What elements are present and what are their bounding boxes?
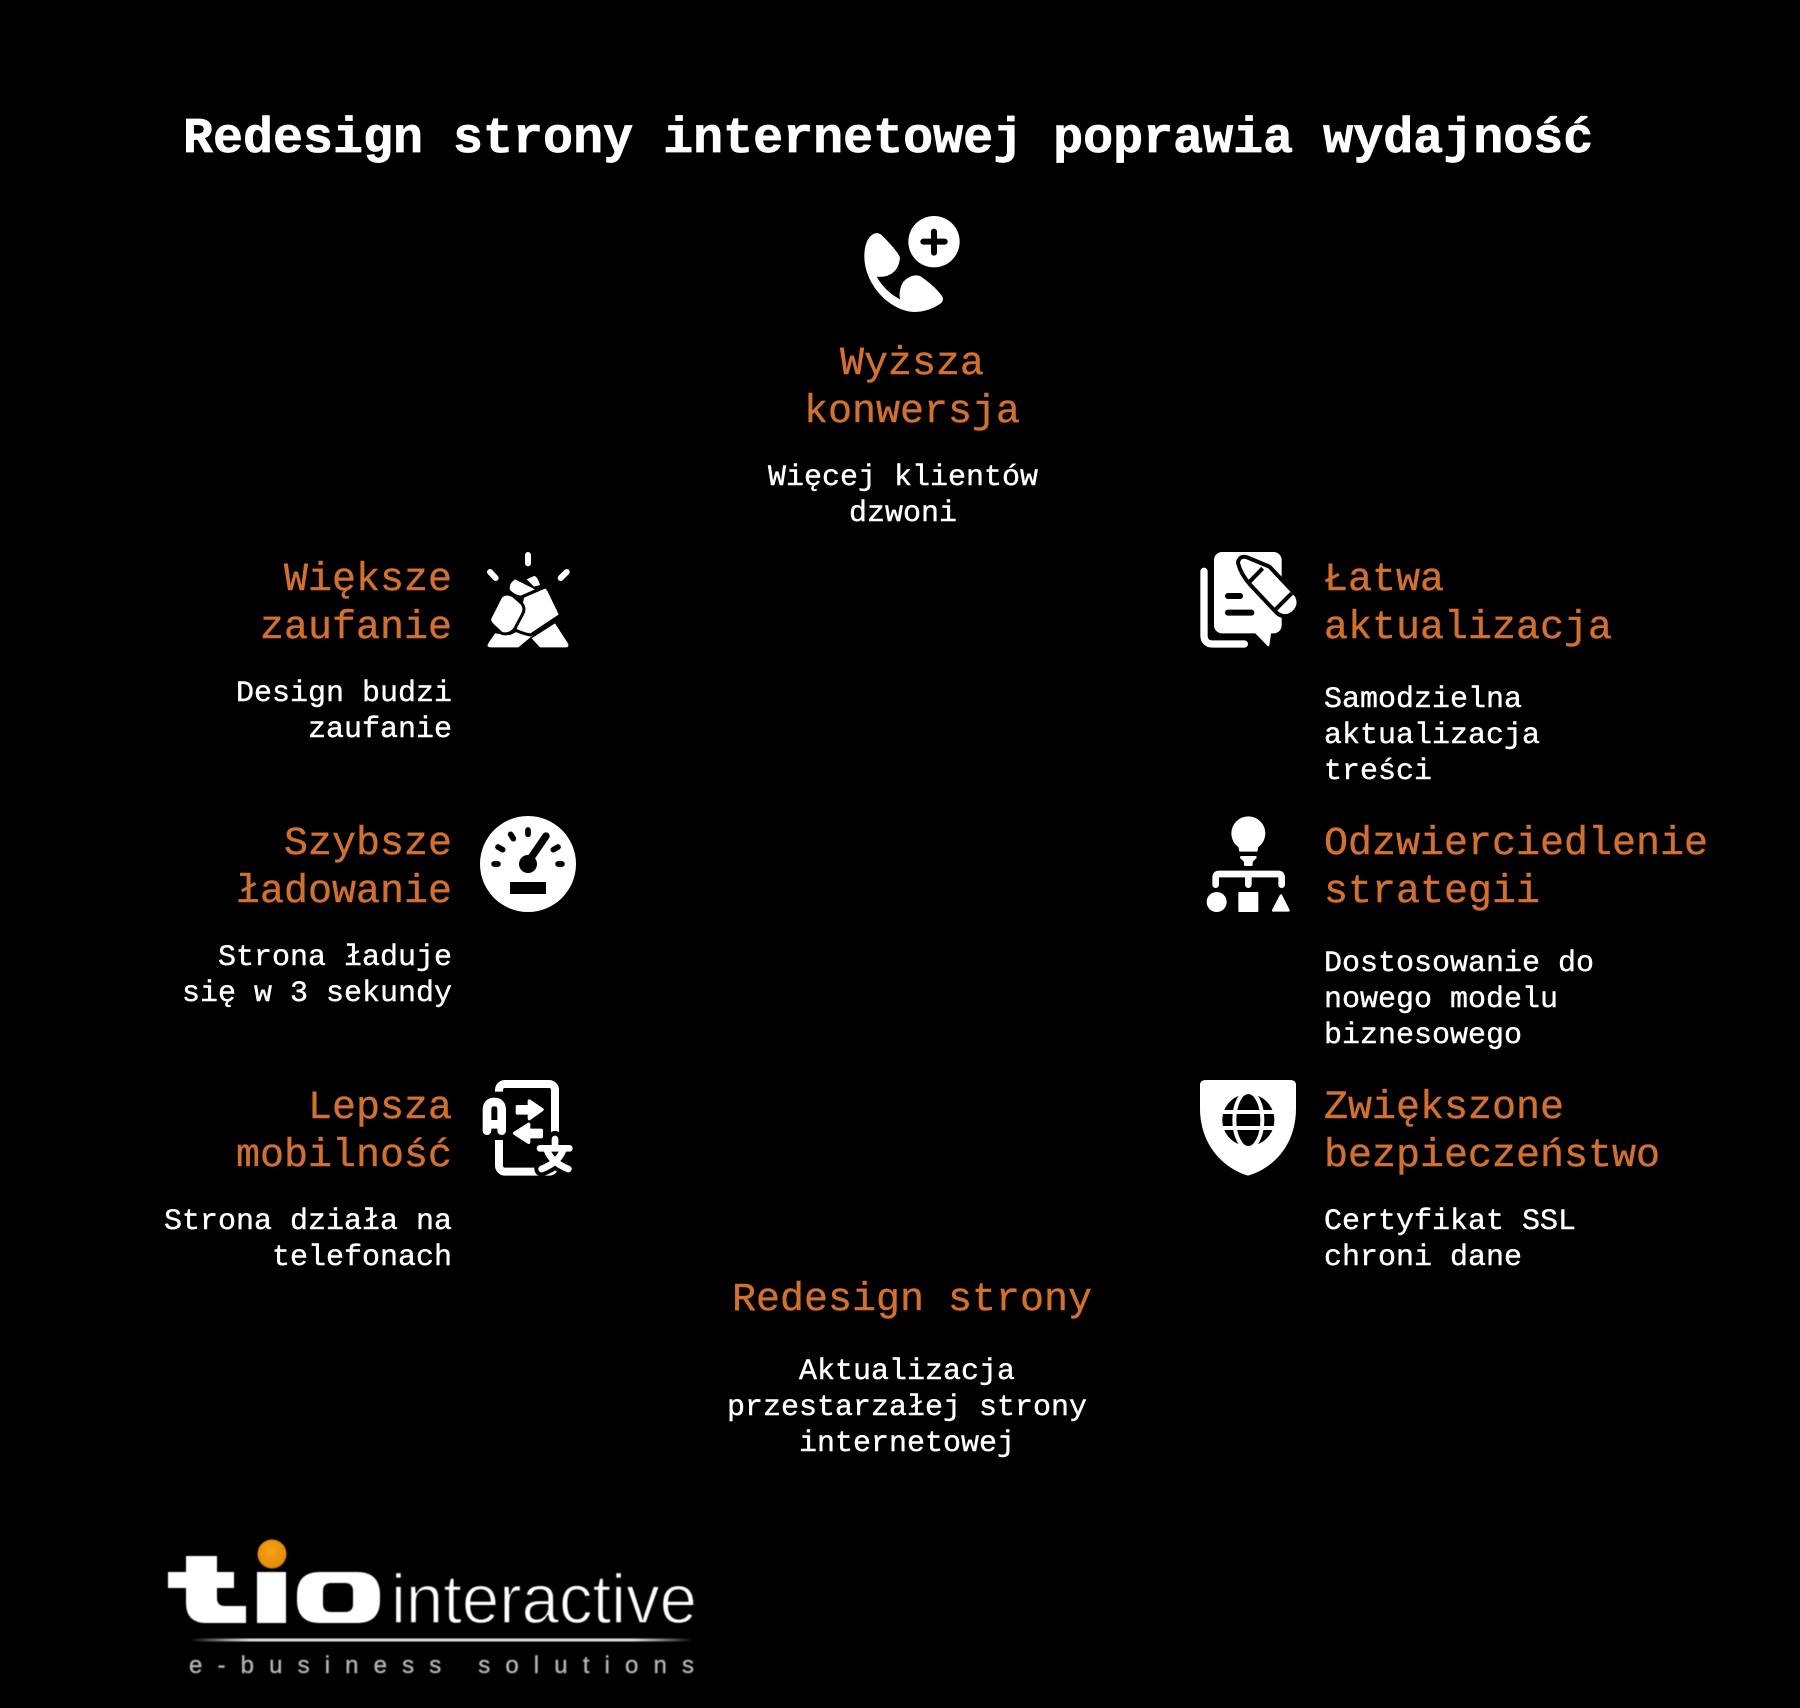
panel: Lepsza mobilność: [164, 1080, 573, 1275]
panel: Wyższa konwersja: [768, 216, 1038, 531]
text: Samodzielna aktualizacja treści: Samodzielna aktualizacja treści: [1324, 683, 1540, 789]
heading: Szybsze ładowanie: Szybsze ładowanie: [236, 822, 452, 915]
icon: shield with globe: [1200, 1080, 1296, 1176]
panel: Łatwa aktualizacja: [1200, 552, 1612, 789]
logo: tio interactive: [167, 1538, 697, 1679]
text: Strona działa na telefonach: Strona działa na telefonach: [164, 1205, 452, 1275]
panel: Redesign strony: [727, 1278, 1092, 1461]
panel: Zwiększone bezpieczeństwo: [1200, 1080, 1660, 1275]
icon: handshake: [487, 552, 570, 648]
panel: Większe zaufanie: [236, 552, 570, 747]
heading: Redesign strony: Redesign strony: [732, 1278, 1092, 1323]
icon: phone translation: [482, 1080, 573, 1176]
heading: Wyższa konwersja: Wyższa konwersja: [804, 342, 1020, 435]
panel: Szybsze ładowanie: [182, 816, 576, 1011]
logo: tio interactive: interactive: [391, 1560, 697, 1638]
text: Dostosowanie do nowego modelu biznesowego: Dostosowanie do nowego modelu biznesowego: [1324, 947, 1594, 1053]
icon: document with pencil: [1200, 552, 1297, 648]
heading: Lepsza mobilność: Lepsza mobilność: [236, 1086, 452, 1179]
text: Certyfikat SSL chroni dane: Certyfikat SSL chroni dane: [1324, 1205, 1576, 1275]
heading: Zwiększone bezpieczeństwo: Zwiększone bezpieczeństwo: [1324, 1086, 1660, 1179]
text: Design budzi zaufanie: Design budzi zaufanie: [236, 677, 452, 747]
text: Więcej klientów dzwoni: Więcej klientów dzwoni: [768, 461, 1038, 531]
icon: bulb with org chart: [1206, 816, 1290, 912]
text: Strona ładuje się w 3 sekundy: Strona ładuje się w 3 sekundy: [182, 941, 452, 1011]
title: Redesign strony internetowej poprawia wydajność: [183, 111, 1593, 168]
heading: Łatwa aktualizacja: Łatwa aktualizacja: [1324, 558, 1612, 651]
logo: tio interactive: e-business solutions: [189, 1652, 694, 1679]
heading: Większe zaufanie: Większe zaufanie: [260, 558, 452, 651]
icon: phone with plus: [864, 216, 960, 312]
text: Aktualizacja przestarzałej strony internetowej: Aktualizacja przestarzałej strony internetowej: [727, 1355, 1087, 1461]
icon: speedometer: [480, 816, 576, 912]
panel: Odzwierciedlenie strategii: [1206, 816, 1708, 1053]
heading: Odzwierciedlenie strategii: Odzwierciedlenie strategii: [1324, 822, 1708, 915]
